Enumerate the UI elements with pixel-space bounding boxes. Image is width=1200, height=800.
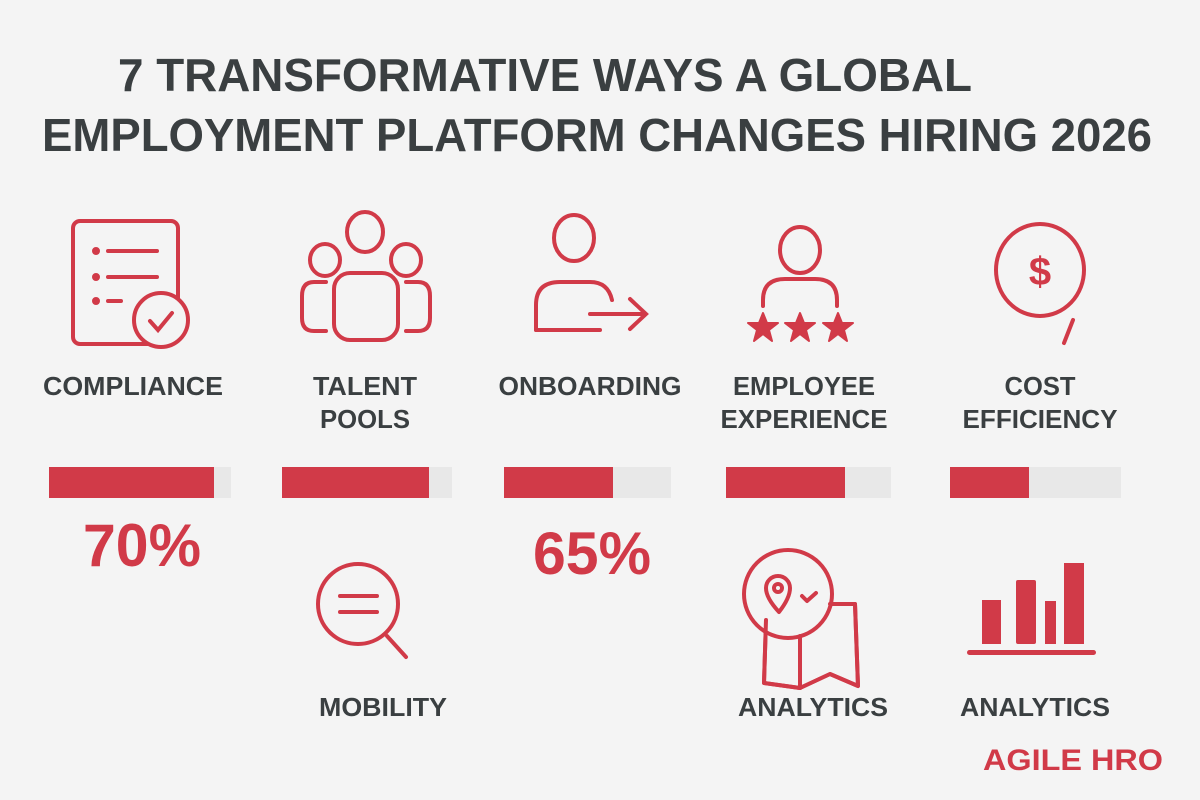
title xyxy=(42,49,1152,161)
label: cost efficiency xyxy=(962,371,1118,434)
label: cost efficiency: COST xyxy=(1004,371,1076,401)
label: employee experience xyxy=(720,371,888,434)
label: employee experience: EMPLOYEE xyxy=(733,371,875,401)
bar: cost efficiency xyxy=(950,467,1121,498)
label: mobility: MOBILITY xyxy=(319,692,447,722)
bar: compliance xyxy=(49,467,231,498)
label: employee experience: EXPERIENCE xyxy=(720,404,888,434)
bar: onboarding xyxy=(504,467,671,498)
icon: employee experience xyxy=(748,227,853,341)
label: analytics 1: ANALYTICS xyxy=(738,692,888,722)
title: 7 TRANSFORMATIVE WAYS A GLOBAL xyxy=(118,49,972,101)
stat: 65%: 65% xyxy=(533,520,651,587)
title: EMPLOYMENT PLATFORM CHANGES HIRING 2026 xyxy=(42,109,1152,161)
icon: cost efficiency: $ xyxy=(1029,250,1051,294)
label: cost efficiency: EFFICIENCY xyxy=(962,404,1118,434)
bar: employee experience xyxy=(726,467,891,498)
stat: 70%: 70% xyxy=(83,512,201,579)
label: analytics 2: ANALYTICS xyxy=(960,692,1110,722)
label: talent pools xyxy=(313,371,417,434)
icon: talent pools people xyxy=(302,212,430,340)
bar: talent pools xyxy=(282,467,452,498)
icon: onboarding person with arrow xyxy=(536,215,646,330)
label: talent pools: POOLS xyxy=(320,404,410,434)
icon: compliance document xyxy=(73,221,188,347)
label: onboarding: ONBOARDING xyxy=(498,371,682,401)
label: talent pools: TALENT xyxy=(313,371,417,401)
icon: cost efficiency xyxy=(996,224,1084,343)
brand: agile hro: AGILE HRO xyxy=(983,744,1163,777)
icon: mobility magnifier xyxy=(318,564,406,657)
icon: analytics bar chart xyxy=(967,563,1096,655)
icon: analytics map xyxy=(744,550,858,688)
label: compliance: COMPLIANCE xyxy=(43,371,223,401)
